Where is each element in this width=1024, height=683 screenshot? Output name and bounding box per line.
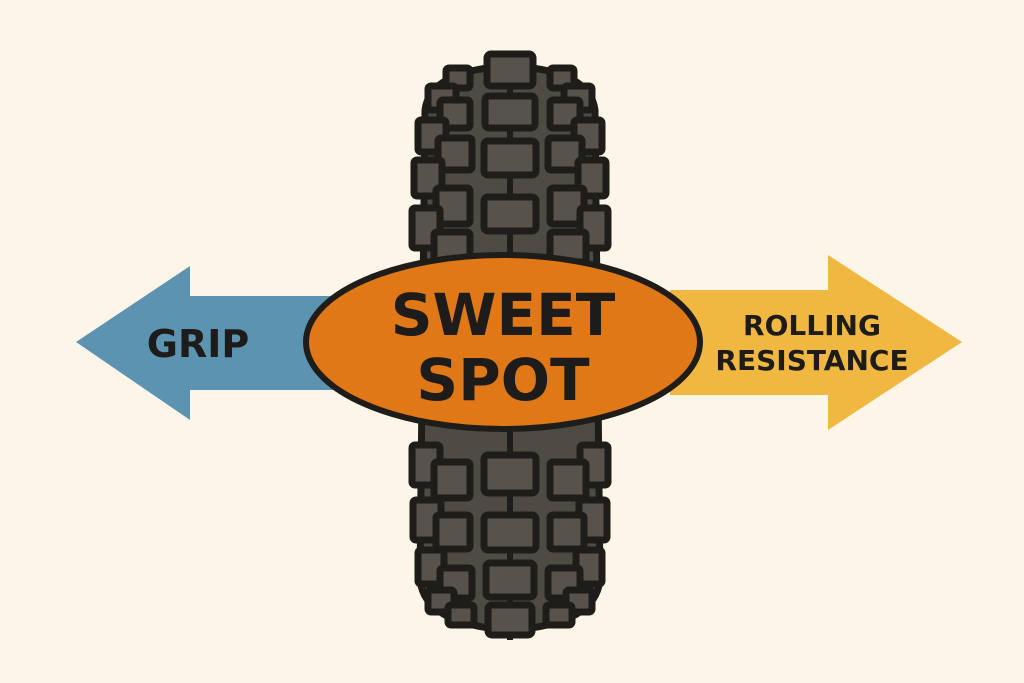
- arrow: rolling resistance (right): [670, 255, 962, 430]
- label: resistance: RESISTANCE: [715, 344, 909, 377]
- tire: [412, 54, 608, 640]
- label: rolling resistance: ROLLING: [743, 309, 881, 342]
- label: spot: SPOT: [416, 346, 590, 414]
- arrow: grip (left): [76, 266, 340, 420]
- left side lugs: [446, 68, 470, 88]
- sweet spot ellipse: [306, 255, 700, 429]
- label: grip: GRIP: [147, 322, 249, 366]
- label: sweet spot: SWEET: [391, 281, 616, 349]
- right side lugs: [550, 68, 574, 88]
